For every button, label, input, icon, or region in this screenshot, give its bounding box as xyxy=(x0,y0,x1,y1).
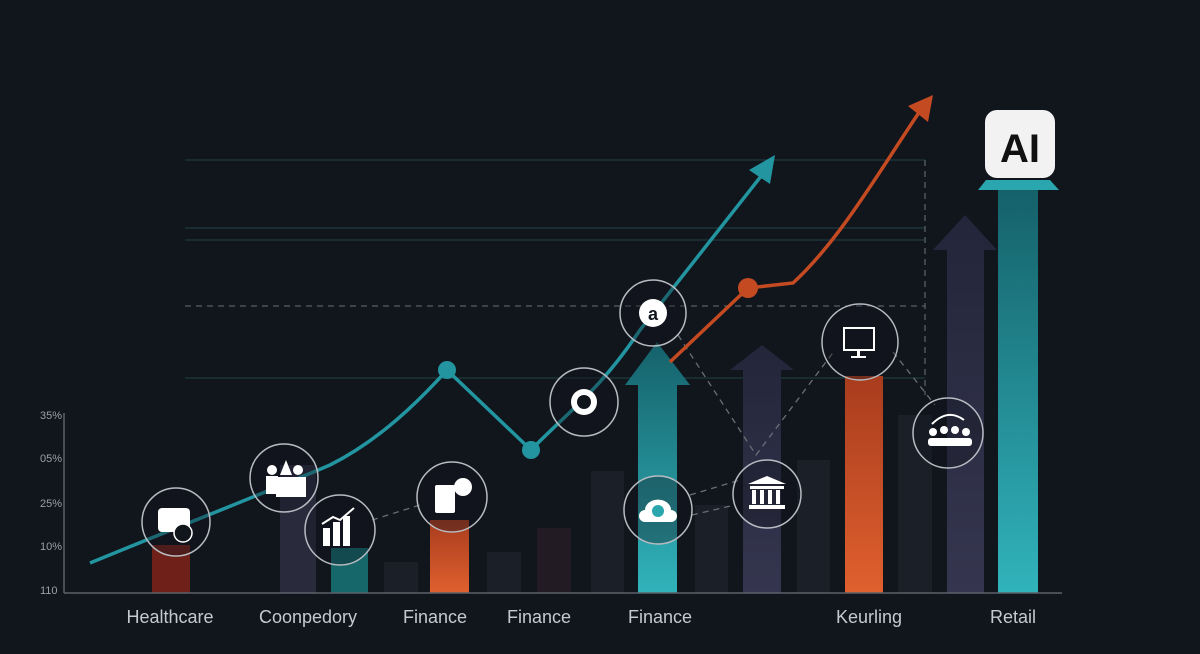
category labels xyxy=(126,607,1036,627)
icon circles xyxy=(142,280,983,565)
arrow bar: teal finance xyxy=(625,342,690,593)
y axis labels: 25% xyxy=(40,498,62,510)
grid lines xyxy=(185,160,925,378)
y axis labels: 10% xyxy=(40,541,62,553)
bar: teal xyxy=(331,548,368,593)
category labels: Retail xyxy=(990,607,1036,627)
icons xyxy=(158,299,972,546)
bar: retail teal with AI: AI xyxy=(1000,127,1040,171)
y axis labels xyxy=(40,410,62,597)
bar: finance orange xyxy=(430,520,469,593)
category labels: Finance xyxy=(403,607,467,627)
icons: a xyxy=(648,304,659,324)
background bars xyxy=(384,415,932,593)
bar: healthcare xyxy=(152,545,190,593)
arrow bar: purple xyxy=(730,345,794,593)
category labels: Finance xyxy=(507,607,571,627)
category labels: Finance xyxy=(628,607,692,627)
teal trend line xyxy=(90,155,775,563)
bar: coonpedory purple xyxy=(280,465,316,593)
category labels: Keurling xyxy=(836,607,902,627)
bar: retail teal with AI xyxy=(978,110,1059,593)
y axis labels: 35% xyxy=(40,410,62,422)
orange trend line xyxy=(670,95,933,362)
bar: keurling orange xyxy=(845,376,883,593)
y axis labels: 110 xyxy=(40,585,58,597)
category labels: Healthcare xyxy=(126,607,214,627)
axes xyxy=(64,413,1062,593)
arrow bar: purple tall xyxy=(933,215,997,593)
y axis labels: 05% xyxy=(40,453,62,465)
category labels: Coonpedory xyxy=(259,607,357,627)
dashed connectors xyxy=(372,335,935,520)
